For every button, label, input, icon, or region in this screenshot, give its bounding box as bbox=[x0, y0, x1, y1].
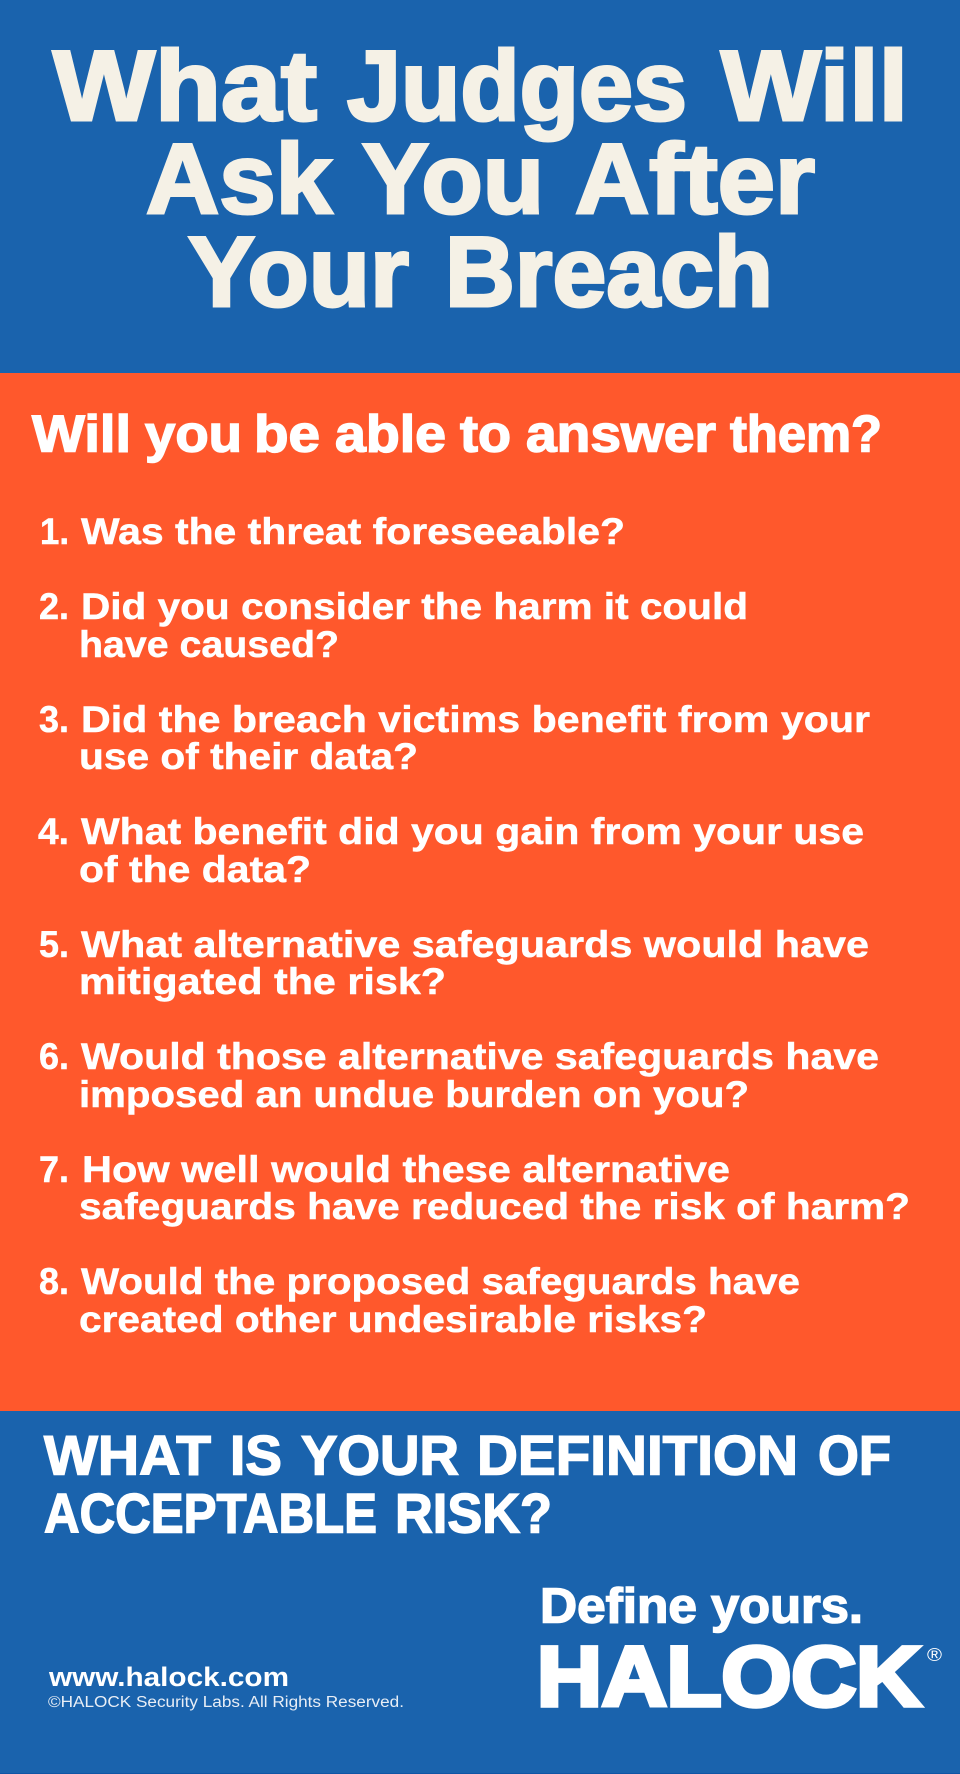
question 3: Did the breach victims benefit from your bbox=[81, 698, 870, 740]
question 8: created other undesirable risks? bbox=[79, 1298, 707, 1340]
question 4 bbox=[38, 810, 864, 890]
logo: HALOCK: ® bbox=[927, 1645, 942, 1665]
closing question: WHAT bbox=[44, 1424, 211, 1486]
closing question: DEFINITION bbox=[477, 1424, 798, 1486]
question 6: imposed an undue burden on you? bbox=[79, 1073, 749, 1115]
question 6 bbox=[39, 1035, 879, 1115]
question 5: What alternative safeguards would have bbox=[81, 923, 869, 965]
question 7: 7. bbox=[39, 1148, 69, 1190]
panel: title background bbox=[0, 0, 960, 373]
subheading: Will bbox=[32, 406, 131, 464]
question 4: of the data? bbox=[79, 848, 311, 890]
title bbox=[53, 30, 908, 327]
question 8 bbox=[39, 1260, 800, 1340]
tagline: yours. bbox=[711, 1580, 863, 1634]
title: You bbox=[362, 123, 544, 234]
question 4: 4. bbox=[38, 810, 69, 852]
subheading bbox=[32, 406, 882, 464]
subheading: to bbox=[460, 406, 511, 464]
closing question: ACCEPTABLE bbox=[44, 1482, 377, 1544]
question 1: 1. bbox=[40, 510, 69, 552]
title: Ask bbox=[146, 123, 333, 234]
question 3 bbox=[39, 698, 870, 777]
closing question bbox=[44, 1424, 891, 1544]
question 3: 3. bbox=[39, 698, 69, 740]
question 5: mitigated the risk? bbox=[79, 960, 446, 1002]
title: What bbox=[53, 30, 317, 141]
tagline bbox=[540, 1580, 863, 1634]
closing question: OF bbox=[818, 1424, 891, 1486]
copyright: ©HALOCK Security Labs. All Rights Reserved. bbox=[48, 1694, 404, 1711]
title: Breach bbox=[445, 216, 773, 327]
question 7: How well would these alternative bbox=[82, 1148, 730, 1190]
question 2: Did you consider the harm it could bbox=[81, 585, 748, 627]
question 7 bbox=[39, 1148, 910, 1227]
subheading: them? bbox=[730, 406, 882, 464]
question 6: Would those alternative safeguards have bbox=[81, 1035, 879, 1077]
title: Will bbox=[721, 30, 908, 141]
tagline: Define bbox=[540, 1580, 697, 1634]
question 3: use of their data? bbox=[79, 735, 418, 777]
question 8: 8. bbox=[39, 1260, 69, 1302]
question 2: have caused? bbox=[79, 623, 339, 665]
question 7: safeguards have reduced the risk of harm? bbox=[79, 1185, 910, 1227]
question 5 bbox=[39, 923, 869, 1002]
subheading: answer bbox=[526, 406, 716, 464]
question 2 bbox=[39, 585, 748, 665]
question 8: Would the proposed safeguards have bbox=[81, 1260, 800, 1302]
closing question: IS bbox=[230, 1424, 282, 1486]
closing question: RISK? bbox=[395, 1482, 552, 1544]
closing question: YOUR bbox=[301, 1424, 459, 1486]
question 1: Was the threat foreseeable? bbox=[81, 510, 625, 552]
question 2: 2. bbox=[39, 585, 69, 627]
website: www.halock.com bbox=[48, 1662, 289, 1692]
panel: footer bbox=[0, 1411, 960, 1774]
subheading: able bbox=[335, 406, 446, 464]
question 5: 5. bbox=[39, 923, 69, 965]
question 6: 6. bbox=[39, 1035, 69, 1077]
question 4: What benefit did you gain from your use bbox=[81, 810, 864, 852]
subheading: you bbox=[145, 406, 242, 464]
logo: HALOCK: HALOCK bbox=[537, 1630, 921, 1724]
title: Judges bbox=[347, 30, 687, 141]
subheading: be bbox=[254, 406, 320, 464]
title: Your bbox=[188, 216, 409, 327]
title: After bbox=[575, 123, 815, 234]
panel: questions bbox=[0, 373, 960, 1411]
